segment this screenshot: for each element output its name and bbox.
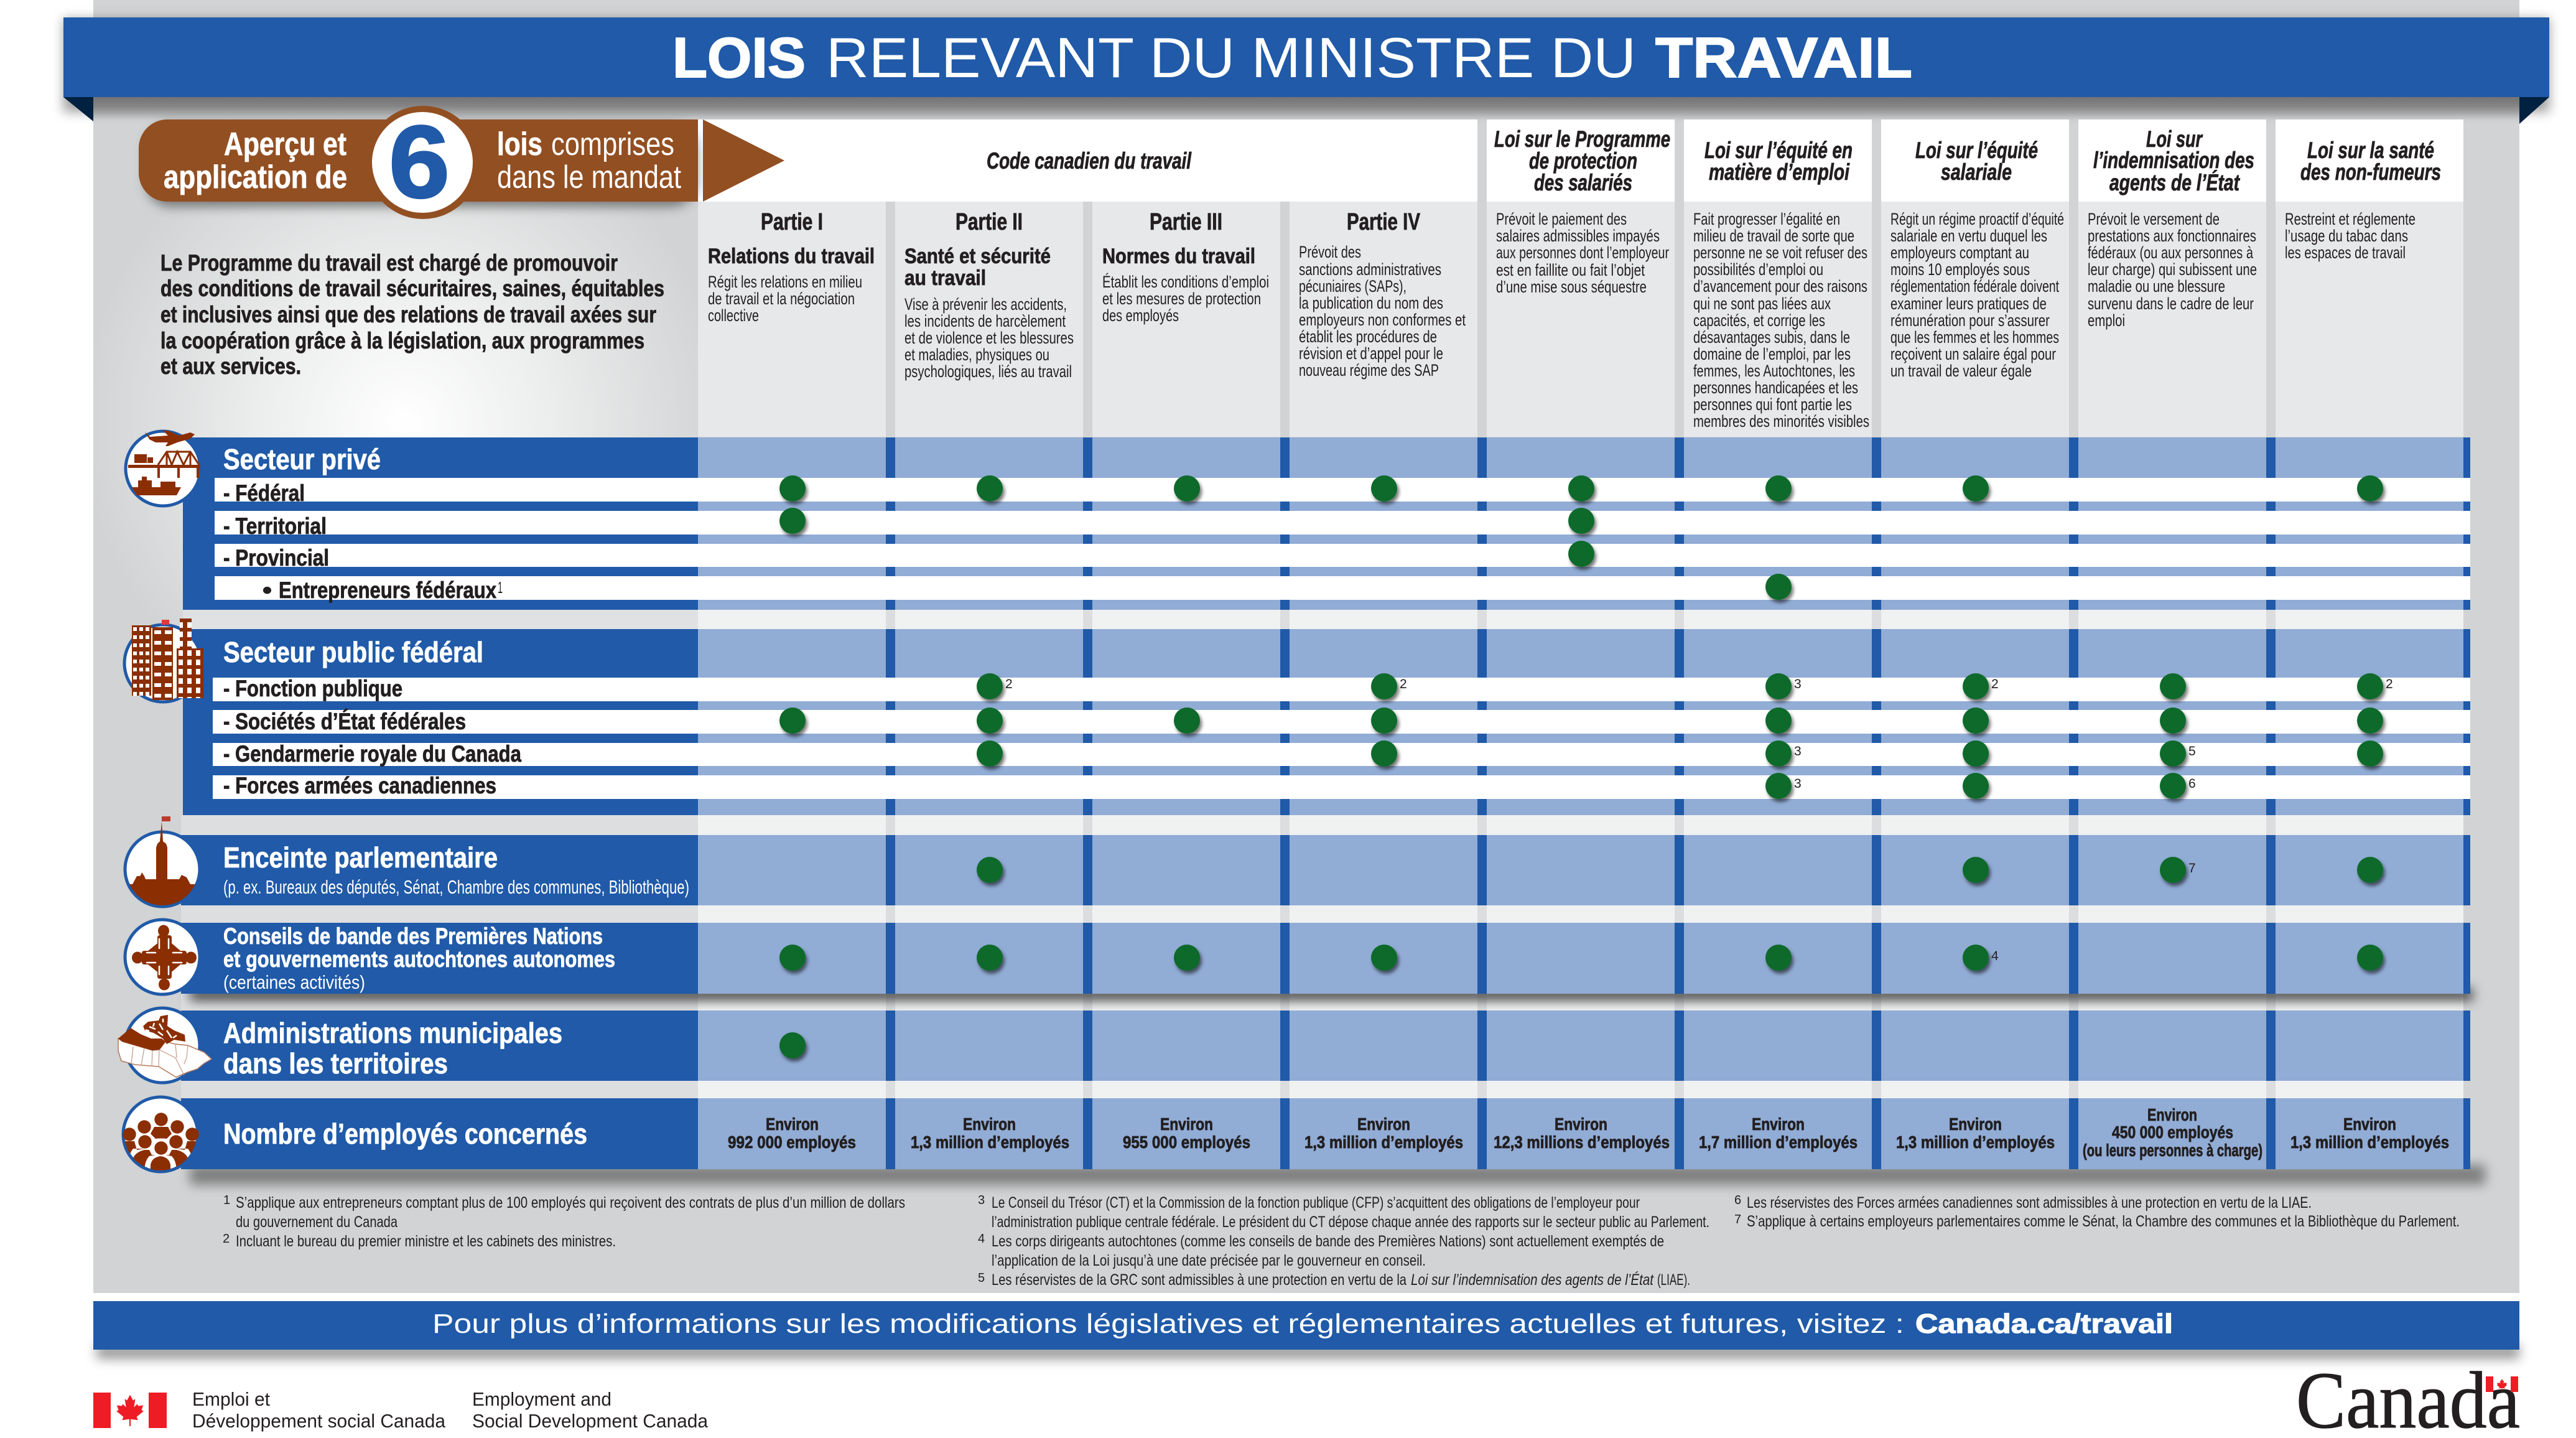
column: Partie II: et de violence et les blessures (904, 329, 1074, 347)
column: équité en matière d'emploi text: personnes handicapées et les (1693, 378, 1858, 397)
column: Partie I: Régit les relations en milieu (708, 273, 862, 291)
icon: Parliament Peace Tower (124, 816, 202, 909)
column: Partie IV: révision et d’appel pour le (1299, 344, 1443, 363)
column: équité en matière d'emploi text: femmes, les Autochtones, les (1693, 362, 1855, 380)
department name French: Emploi et (192, 1388, 270, 1410)
column: protection des salariés text: d’une mise sous séquestre (1496, 278, 1647, 296)
column: protection des salariés text: salaires admissibles impayés (1496, 226, 1660, 245)
column: équité en matière d'emploi text: désavantages subis, dans le (1693, 328, 1850, 347)
icon: federal buildings (124, 619, 203, 702)
dots: Conseils row (779, 945, 2383, 971)
band: Conseils de bande: et gouvernements autochtones autonomes (223, 946, 615, 972)
footnotes column 1: S’applique aux entrepreneurs comptant plus de 100 employés qui reçoivent des contrats de plus d’un million de dollars (236, 1194, 905, 1212)
column: Partie II: les incidents de harcèlement (904, 312, 1066, 330)
column: équité en matière d'emploi text: Fait progresser l’égalité en (1693, 210, 1840, 228)
column: indemnisation text: maladie ou une blessure (2088, 277, 2225, 296)
row label: Entrepreneurs fédéraux: Entrepreneurs fédéraux (279, 577, 496, 603)
intro text: des conditions de travail sécuritaires, saines, équitables (160, 276, 664, 301)
footnotes column 1: Incluant le bureau du premier ministre et les cabinets des ministres. (236, 1233, 616, 1250)
footer band with link (93, 1301, 2519, 1350)
employee counts: Environ (2343, 1114, 2396, 1134)
column: équité en matière d'emploi text: qui ne sont pas liées aux (1693, 294, 1831, 313)
employee counts: 955 000 employés (1123, 1132, 1250, 1152)
employee counts: 450 000 employés (2112, 1123, 2233, 1142)
overview badge: 6 (389, 105, 450, 219)
band: Administrations municipales: dans les territoires (223, 1047, 448, 1080)
footnotes column 2: 3 (978, 1193, 985, 1207)
column: Partie IV: nouveau régime des SAP (1299, 361, 1439, 380)
logo: Canada flag (93, 1393, 167, 1428)
column: non-fumeurs text: les espaces de travail (2285, 243, 2406, 262)
heading: Loi sur le Programme de protection des salariés: de protection (1529, 148, 1637, 174)
footnote markers on dots: 7 (2188, 861, 2196, 875)
intro text: la coopération grâce à la législation, aux programmes (160, 328, 644, 353)
column: indemnisation text: fédéraux (ou aux personnes à (2088, 243, 2254, 262)
dots: Forces armées row (1765, 773, 2186, 799)
footer band with link: Pour plus d’informations sur les modifications législatives et réglementaires actuelles et futures, visitez : (432, 1309, 1904, 1339)
row label: Provincial: - Provincial (223, 545, 329, 571)
footnotes column 2 (978, 1193, 1709, 1289)
intro text: et aux services. (160, 353, 301, 379)
column: protection des salariés text: est en faillite ou fait l’objet (1496, 261, 1645, 279)
employee counts: 12,3 millions d’employés (1494, 1132, 1670, 1152)
employee counts: Environ (1160, 1114, 1213, 1134)
dots: Entrepreneurs row (1765, 574, 1792, 600)
column: Partie IV: employeurs non conformes et (1299, 310, 1466, 329)
column: Partie IV (1299, 209, 1466, 380)
heading: Loi sur l'indemnisation des agents de l'État: agents de l’État (2109, 170, 2240, 195)
footnotes column 3: Les réservistes des Forces armées canadiennes sont admissibles à une protection en vertu de la LIAE. (1747, 1194, 2312, 1212)
column: Partie III (1102, 209, 1269, 325)
column: Partie IV: pécuniaires (SAPs), (1299, 277, 1407, 296)
column: indemnisation text: survenu dans le cadre de leur (2088, 294, 2254, 313)
heading: Secteur privé: Secteur privé (223, 443, 381, 475)
column: indemnisation text: leur charge) qui subissent une (2088, 260, 2257, 279)
footnotes column 1 (223, 1193, 905, 1250)
footnotes column 2: Loi sur l’indemnisation des agents de l’État (1411, 1271, 1654, 1289)
employee counts: 1,7 million d’employés (1699, 1132, 1858, 1152)
footnote markers on dots: 3 (1794, 744, 1802, 759)
overview badge: dans le mandat (497, 159, 681, 195)
column: indemnisation text: prestations aux fonctionnaires (2088, 226, 2256, 245)
row label: Territorial: - Territorial (223, 513, 327, 539)
employee counts: Environ (766, 1114, 819, 1134)
footnote markers on dots: 4 (1991, 949, 1999, 963)
footnote markers on dots: 2 (1005, 677, 1013, 691)
title: LOIS (672, 27, 806, 90)
footnotes column 2: Les corps dirigeants autochtones (comme les conseils de bande des Premières Nations) sont actuellement exemptés de (992, 1233, 1664, 1250)
overview badge: comprises (551, 126, 674, 162)
column: Partie II: et maladies, physiques ou (904, 345, 1049, 364)
footnotes column 3: 6 (1734, 1193, 1741, 1207)
column: équité en matière d'emploi text: personne ne se voit refuser des (1693, 243, 1867, 262)
footnotes column 3 (1734, 1193, 2460, 1230)
employee counts: Environ (963, 1114, 1016, 1134)
employee counts: Environ (2147, 1105, 2197, 1124)
title banner (63, 17, 2549, 124)
column: non-fumeurs text: l’usage du tabac dans (2285, 226, 2408, 245)
band: Administrations municipales: Administrations municipales (223, 1017, 562, 1049)
heading: Secteur public fédéral: Secteur public fédéral (223, 636, 483, 668)
heading: Code canadien du travail: Code canadien du travail (987, 148, 1192, 174)
column: Partie III: et les mesures de protection (1102, 289, 1261, 308)
column: protection des salariés text (1496, 210, 1669, 296)
footnote markers on dots: 3 (1794, 777, 1802, 791)
column: indemnisation text (2088, 210, 2257, 330)
heading: Loi sur l'équité en matière d'emploi: Loi sur l’équité en (1704, 138, 1853, 163)
department name French (192, 1388, 446, 1432)
band: Administrations municipales (181, 1011, 2470, 1081)
column: Partie III: Établit les conditions d’emploi (1102, 273, 1269, 291)
heading: Loi sur l'équité en matière d'emploi: matière d’emploi (1709, 159, 1850, 185)
column: équité en matière d'emploi text: membres des minorités visibles (1693, 412, 1869, 431)
overview badge (139, 105, 784, 219)
column: équité salariale text: Régit un régime proactif d’équité (1890, 210, 2064, 228)
heading: Loi sur l'équité salariale (1915, 138, 2038, 185)
icon: First Nations council circle (125, 920, 200, 994)
heading: Loi sur le Programme de protection des salariés: Loi sur le Programme (1494, 126, 1670, 152)
column: Partie IV: Prévoit des (1299, 243, 1361, 261)
column: non-fumeurs text (2285, 210, 2416, 262)
overview badge: Aperçu et (224, 126, 346, 162)
title (672, 27, 1912, 90)
band: Conseils de bande (181, 923, 2470, 994)
column: Partie II: psychologiques, liés au travail (904, 362, 1072, 381)
band: Enceinte parlementaire: (p. ex. Bureaux des députés, Sénat, Chambre des communes, Bibliothèque) (223, 876, 689, 898)
band: Secteur privé (183, 437, 2470, 610)
heading: Loi sur l'équité en matière d'emploi (1704, 138, 1853, 185)
heading: Loi sur l'indemnisation des agents de l'État: l’indemnisation des (2093, 147, 2254, 173)
dots: Provincial row (1568, 541, 1594, 567)
footnote markers on dots: 5 (2188, 744, 2196, 759)
footnotes column 2: (LIAE). (1657, 1271, 1690, 1289)
footnote markers on dots: 6 (2188, 777, 2196, 791)
column: équité salariale text: moins 10 employés sous (1890, 260, 2030, 279)
column: Partie IV: sanctions administratives (1299, 260, 1441, 279)
employee counts: Environ (1949, 1114, 2002, 1134)
employee counts: Environ (1357, 1114, 1410, 1134)
heading: Loi sur l'équité salariale: Loi sur l’équité (1915, 138, 2038, 163)
dots: Fonction publique row (977, 673, 2383, 699)
column: équité en matière d'emploi text: capacités, et corrige les (1693, 311, 1825, 330)
column: indemnisation text: emploi (2088, 311, 2125, 330)
column: équité en matière d'emploi text: personnes qui font partie les (1693, 395, 1852, 414)
footer band shadow (96, 1344, 2519, 1359)
intro text (160, 250, 664, 379)
column: Partie II (904, 209, 1074, 381)
footnotes column 1: du gouvernement du Canada (236, 1213, 398, 1231)
row label: Entrepreneurs fédéraux: 1 (498, 578, 503, 597)
icon: group of employees (123, 1097, 199, 1173)
dots: Fédéral row (779, 475, 2383, 502)
icon: transport (plane, truck, bridge, ship) (126, 431, 200, 506)
employee counts: 1,3 million d’employés (1304, 1132, 1463, 1152)
band: Nombre d'employés concernés (181, 1098, 2470, 1169)
footnote markers on dots: 2 (1991, 677, 1999, 691)
department name English: Social Development Canada (472, 1410, 709, 1432)
column: équité salariale text: employeurs comptant au (1890, 243, 2029, 262)
overview badge: application de (164, 159, 347, 195)
band: Nombre d'employés concernés: Nombre d’employés concernés (223, 1118, 587, 1150)
heading: Loi sur la santé des non-fumeurs: Loi sur la santé (2307, 138, 2434, 163)
footnote markers on dots: 2 (1400, 677, 1407, 691)
column: équité en matière d'emploi text: possibilités d’emploi ou (1693, 260, 1823, 279)
column: Partie II: Santé et sécurité (904, 245, 1051, 268)
heading: Loi sur le Programme de protection des salariés (1494, 126, 1670, 195)
intro text: et inclusives ainsi que des relations de travail axées sur (160, 302, 656, 327)
column: équité en matière d'emploi text: milieu de travail de sorte que (1693, 226, 1854, 245)
column: Partie IV: Partie IV (1347, 209, 1421, 235)
employee counts: (ou leurs personnes à charge) (2083, 1141, 2262, 1160)
panel: intro glow background (93, 202, 698, 631)
heading: Loi sur le Programme de protection des salariés: des salariés (1534, 170, 1632, 195)
band: Conseils de bande: Conseils de bande des Premières Nations (223, 923, 603, 949)
employee counts: 992 000 employés (728, 1132, 856, 1152)
column: équité en matière d'emploi text: d’avancement pour des raisons (1693, 277, 1867, 296)
column: équité salariale text (1890, 210, 2064, 380)
footnotes column 1: 2 (223, 1232, 230, 1246)
column: équité en matière d'emploi text: domaine de l’emploi, par les (1693, 345, 1851, 363)
column: Partie III: Partie III (1150, 209, 1222, 235)
column: protection des salariés text: Prévoit le paiement des (1496, 210, 1627, 228)
dots: Sociétés d'État row (779, 707, 2383, 734)
column: non-fumeurs text: Restreint et réglemente (2285, 210, 2416, 228)
footnotes column 2: 5 (978, 1271, 985, 1285)
heading: Loi sur l'indemnisation des agents de l'État (2093, 126, 2254, 195)
employee counts: Environ (1555, 1114, 1607, 1134)
row label: Forces armées canadiennes: - Forces armées canadiennes (223, 773, 496, 798)
intro text: Le Programme du travail est chargé de promouvoir (160, 250, 618, 276)
column: Partie III: des employés (1102, 306, 1179, 325)
table header cells (698, 119, 2463, 437)
footnotes column 2: Le Conseil du Trésor (CT) et la Commission de la fonction publique (CFP) s’acquittent des obligations de l’employeur pour (992, 1194, 1640, 1212)
band: Secteur public fédéral (183, 629, 2470, 815)
row label: Sociétés d'État fédérales: - Sociétés d’État fédérales (223, 709, 466, 734)
footnotes column 2: l’application de la Loi jusqu’à une date précisée par le gouverneur en conseil. (992, 1252, 1426, 1269)
overview badge: lois (497, 126, 542, 162)
footnotes column 2: Les réservistes de la GRC sont admissibles à une protection en vertu de la (992, 1271, 1407, 1289)
employee counts: Environ (1752, 1114, 1805, 1134)
dots: Administrations row (779, 1032, 806, 1058)
employee counts: 1,3 million d’employés (1896, 1132, 2055, 1152)
row gaps background (181, 610, 2485, 1185)
department name French: Développement social Canada (192, 1410, 446, 1432)
department name English: Employment and (472, 1388, 611, 1410)
column: équité salariale text: réglementation fédérale doivent (1890, 277, 2059, 296)
column: Partie I: de travail et la négociation (708, 289, 855, 308)
heading: Loi sur l'indemnisation des agents de l'État: Loi sur (2146, 126, 2203, 152)
employee counts: 1,3 million d’employés (2290, 1132, 2449, 1152)
footnote markers on dots: 3 (1794, 677, 1802, 691)
footnotes column 1: 1 (223, 1193, 230, 1207)
row label: Gendarmerie royale du Canada: - Gendarmerie royale du Canada (223, 741, 521, 767)
column: Partie I: Relations du travail (708, 245, 875, 268)
title: RELEVANT DU MINISTRE DU (826, 27, 1636, 90)
header shadow (93, 97, 2519, 121)
column: Partie II: Partie II (956, 209, 1023, 235)
column: Partie II: Vise à prévenir les accidents, (904, 295, 1067, 314)
footnotes column 3: 7 (1734, 1213, 1741, 1226)
column: équité en matière d'emploi text (1693, 210, 1869, 431)
footer band with link: Canada.ca/travail (1915, 1309, 2173, 1339)
icon: map of Canada with territories highlighted (118, 1008, 212, 1083)
column: équité salariale text: reçoivent un salaire égal pour (1890, 345, 2056, 363)
band: Enceinte parlementaire: Enceinte parlementaire (223, 841, 498, 874)
footnote markers on dots: 2 (2386, 677, 2393, 691)
column: indemnisation text: Prévoit le versement de (2088, 210, 2220, 228)
column: équité salariale text: que les femmes et les hommes (1890, 328, 2059, 347)
column: protection des salariés text: aux personnes dont l’employeur (1496, 243, 1669, 262)
row label: Fonction publique: - Fonction publique (223, 676, 402, 701)
column: Partie I: Partie I (761, 209, 823, 235)
dots: Enceinte row (977, 857, 2383, 883)
employee counts: 1,3 million d’employés (911, 1132, 1069, 1152)
row label: Fédéral: - Fédéral (223, 480, 305, 506)
heading: Loi sur la santé des non-fumeurs: des non-fumeurs (2300, 159, 2441, 185)
column: Partie III: Normes du travail (1102, 245, 1255, 268)
heading: Loi sur l'équité salariale: salariale (1941, 159, 2012, 185)
column: équité salariale text: examiner leurs pratiques de (1890, 294, 2047, 313)
dots: GRC row (977, 740, 2383, 767)
band: Conseils de bande: (certaines activités) (223, 971, 365, 993)
dots: Territorial row (779, 508, 1594, 534)
employee counts (728, 1105, 2449, 1160)
column: équité salariale text: rémunération pour s’assurer (1890, 311, 2050, 330)
column: Partie I (708, 209, 875, 325)
column: équité salariale text: salariale en vertu duquel les (1890, 226, 2047, 245)
department name English (472, 1388, 709, 1432)
column: Partie I: collective (708, 306, 759, 325)
footnotes column 2: l’administration publique centrale fédérale. Le président du CT dépose chaque année des rapports sur le secteur public au Parlement. (992, 1213, 1709, 1231)
footnote markers on dots (1005, 677, 2393, 963)
band: Enceinte parlementaire (181, 835, 2470, 905)
column: équité salariale text: un travail de valeur égale (1890, 362, 2032, 380)
column: Partie IV: établit les procédures de (1299, 327, 1437, 346)
column: Partie IV: la publication du nom des (1299, 294, 1443, 312)
footnotes column 2: 4 (978, 1232, 985, 1246)
heading: Loi sur la santé des non-fumeurs (2300, 138, 2441, 185)
title: TRAVAIL (1655, 27, 1912, 90)
row label: Entrepreneurs fédéraux: • (263, 577, 272, 603)
column: Partie II: au travail (904, 266, 986, 290)
